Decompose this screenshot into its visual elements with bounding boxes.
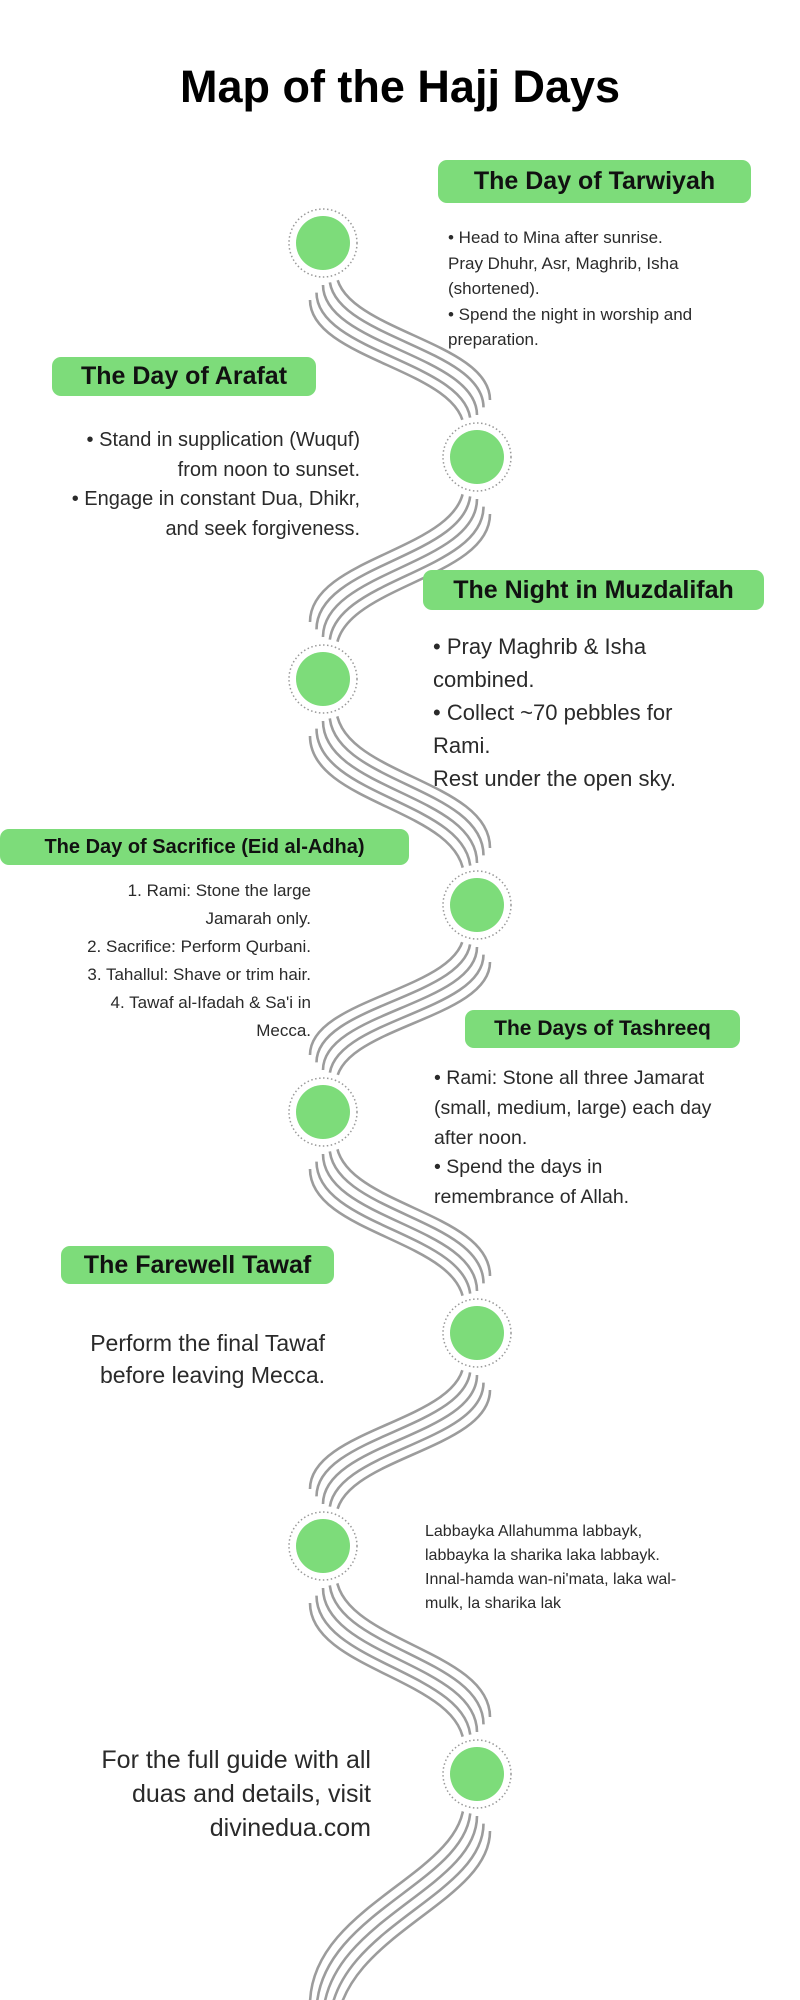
text: Sacrifice (87, 881, 311, 1040)
wavy path (310, 270, 490, 2000)
text: Tashreeq: • Rami: Stone all three Jamarat (434, 1067, 704, 1089)
text: Muzdalifah: Rest under the open sky. (433, 766, 676, 791)
text: Sacrifice: Jamarah only. (205, 909, 311, 928)
text: Tashreeq: remembrance of Allah. (434, 1186, 629, 1208)
text: Farewell: before leaving Mecca. (100, 1362, 325, 1388)
text: talbiyah: Labbayka Allahumma labbayk, (425, 1523, 642, 1540)
text: Tashreeq (434, 1067, 712, 1208)
text: talbiyah: mulk, la sharika lak (425, 1595, 561, 1612)
label: Sacrifice (0, 829, 409, 865)
text: Sacrifice: 3. Tahallul: Shave or trim hair. (87, 965, 311, 984)
label: Farewell (61, 1246, 334, 1284)
label: Farewell: The Farewell Tawaf (84, 1250, 311, 1278)
text: Muzdalifah (433, 634, 676, 791)
text: talbiyah: Innal-hamda wan-ni'mata, laka wal- (425, 1571, 676, 1588)
text: Sacrifice: Mecca. (256, 1021, 311, 1040)
text: Arafat: • Engage in constant Dua, Dhikr, (72, 488, 360, 510)
text: Sacrifice: 1. Rami: Stone the large (128, 881, 311, 900)
text: Arafat: from noon to sunset. (178, 458, 360, 480)
label: Tarwiyah (438, 160, 751, 203)
text: footer link (101, 1746, 371, 1842)
label: Arafat: The Day of Arafat (81, 362, 287, 390)
text: footer link: divinedua.com (210, 1814, 371, 1842)
text: Farewell (90, 1330, 326, 1388)
label: Sacrifice: The Day of Sacrifice (Eid al-Adha) (44, 836, 365, 858)
text: Muzdalifah: Rami. (433, 733, 490, 758)
text: Tashreeq: • Spend the days in (434, 1156, 602, 1178)
text: Tashreeq: after noon. (434, 1127, 527, 1149)
text: Tarwiyah: Pray Dhuhr, Asr, Maghrib, Isha (448, 254, 679, 272)
text: talbiyah (425, 1523, 676, 1612)
text: Muzdalifah: • Pray Maghrib & Isha (433, 634, 646, 659)
label: Tashreeq (465, 1010, 740, 1048)
text: Tarwiyah: • Spend the night in worship and (448, 304, 692, 324)
text: Arafat: and seek forgiveness. (165, 518, 360, 540)
text: Sacrifice: 4. Tawaf al-Ifadah & Sa'i in (111, 993, 311, 1012)
node markers (283, 203, 517, 1814)
text: Arafat (72, 429, 360, 540)
text: Arafat: • Stand in supplication (Wuquf) (87, 429, 360, 451)
label: Muzdalifah (423, 570, 764, 610)
label: Tashreeq: The Days of Tashreeq (494, 1017, 711, 1040)
text: Tarwiyah: (shortened). (448, 279, 540, 298)
text: Farewell: Perform the final Tawaf (90, 1330, 325, 1356)
text: Tarwiyah (448, 228, 692, 349)
text: Tarwiyah: • Head to Mina after sunrise. (448, 228, 663, 247)
text: Tashreeq: (small, medium, large) each day (434, 1097, 711, 1119)
text: Muzdalifah: combined. (433, 667, 535, 692)
text: footer link: duas and details, visit (132, 1780, 371, 1808)
text: Tarwiyah: preparation. (448, 330, 539, 349)
text: footer link: For the full guide with all (101, 1746, 371, 1774)
label: Muzdalifah: The Night in Muzdalifah (453, 576, 734, 604)
label: Arafat (52, 357, 316, 396)
label: Tarwiyah: The Day of Tarwiyah (474, 167, 715, 195)
title: Map of the Hajj Days (180, 61, 620, 112)
text: Sacrifice: 2. Sacrifice: Perform Qurbani. (87, 937, 311, 956)
text: Muzdalifah: • Collect ~70 pebbles for (433, 700, 672, 725)
text: talbiyah: labbayka la sharika laka labbayk. (425, 1547, 660, 1564)
